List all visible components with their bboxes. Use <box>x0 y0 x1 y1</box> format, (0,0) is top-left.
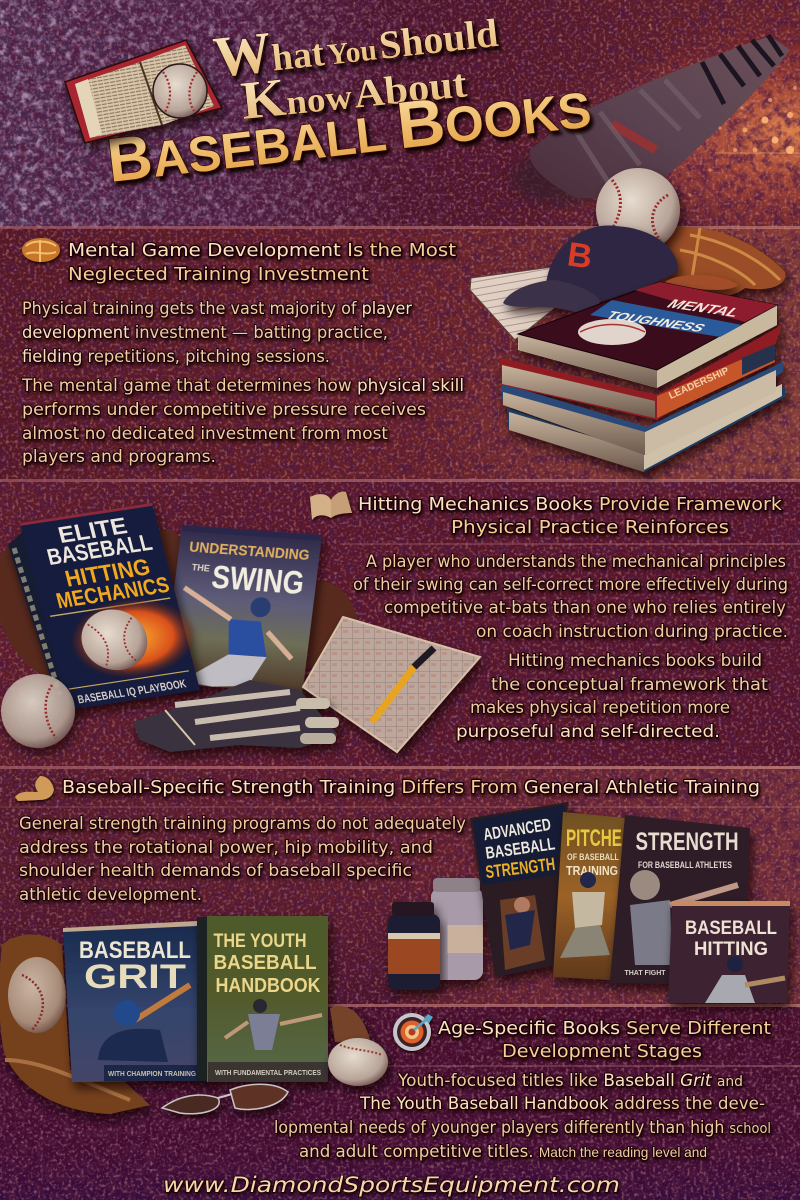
text: mental game body: development investment — batting practice, <box>22 323 388 343</box>
book: Advanced Baseball Strength: BASEBALL <box>484 834 556 863</box>
book: Elite Baseball Hitting Mechanics: BASEBALL <box>45 530 155 571</box>
book: Advanced Baseball Strength <box>470 802 568 977</box>
text: hitting mechanics body <box>353 552 788 742</box>
book: Pitcher Training: TRAINING <box>566 863 618 878</box>
book: Elite Baseball Hitting Mechanics: HITTING <box>63 555 153 592</box>
book: Elite Baseball Hitting Mechanics: ELITE <box>56 514 130 549</box>
book: Elite Baseball Hitting Mechanics: MECHANICS <box>53 572 172 613</box>
baseball in glove <box>8 957 66 1033</box>
text: age specific body: lopmental needs of younger players differently than high school <box>274 1118 771 1138</box>
text: mental game body: Physical training gets the vast majority of player <box>22 299 412 319</box>
panel: hitting mechanics <box>0 491 788 752</box>
text: mental game body: performs under competitive pressure receives <box>22 400 426 420</box>
book: Advanced Baseball Strength: ADVANCED <box>482 815 552 844</box>
title line: Baseball Books: BASEBALLBOOKS <box>103 67 594 196</box>
heading: age specific <box>438 1018 771 1062</box>
baseball <box>328 1038 388 1086</box>
text: mental game body: players and programs. <box>22 447 216 467</box>
baseball <box>1 674 75 748</box>
baseball on book <box>153 64 207 118</box>
heading: age specific: Age-Specific Books Serve Different <box>438 1018 771 1039</box>
book: Baseball Hitting: HITTING <box>694 939 768 960</box>
book 4 <box>507 387 785 472</box>
baseball <box>596 168 680 252</box>
panel: mental game <box>21 168 785 472</box>
book: Strength for Baseball Athletes: FOR BASEBALL ATHLETES <box>638 860 732 870</box>
book: Baseball Hitting: BASEBALL <box>685 918 777 939</box>
book: The Youth Baseball Handbook: BASEBALL <box>214 952 316 974</box>
text: mental game body: The mental game that determines how physical skill <box>21 376 464 396</box>
book 3 <box>501 362 783 455</box>
sunglasses <box>162 1084 288 1114</box>
book: Understanding the Swing: THE <box>191 562 211 573</box>
text: mental game body: almost no dedicated investment from most <box>22 424 388 444</box>
book: The Youth Baseball Handbook <box>197 916 328 1082</box>
text: strength training body: address the rotational power, hip mobility, and <box>19 838 433 858</box>
heading: mental game: Neglected Training Investment <box>68 264 369 285</box>
text: mental game body: fielding repetitions, pitching sessions. <box>22 347 330 367</box>
icon: brain <box>22 238 60 262</box>
heading: hitting mechanics: Hitting Mechanics Books Provide Framework <box>358 494 783 515</box>
book: Pitcher Training <box>553 812 625 980</box>
icon: open book <box>310 491 352 520</box>
book: The Youth Baseball Handbook: HANDBOOK <box>216 975 321 997</box>
text: hitting mechanics body: on coach instruction during practice. <box>476 622 788 642</box>
book: Baseball Hitting <box>668 901 790 1003</box>
heading: mental game: Mental Game Development Is the Most <box>68 240 456 261</box>
text: age specific body: and adult competitive titles. Match the reading level and <box>299 1142 707 1162</box>
text: age specific body: Youth-focused titles like Baseball Grit and <box>397 1071 743 1091</box>
heading: hitting mechanics: Physical Practice Reinforces <box>451 517 729 538</box>
text: age specific body <box>274 1071 771 1162</box>
book: Strength for Baseball Athletes: STRENGTH <box>636 828 738 856</box>
book: Advanced Baseball Strength: STRENGTH <box>484 854 556 882</box>
heading: mental game <box>68 240 456 285</box>
title <box>103 0 594 196</box>
book 2 <box>500 325 782 420</box>
book: Baseball Grit: WITH CHAMPION TRAINING <box>108 1069 196 1078</box>
book: The Youth Baseball Handbook: WITH FUNDAMENTAL PRACTICES <box>215 1068 321 1077</box>
heading: strength training: Baseball-Specific Strength Training Differs From General Athletic Training <box>62 777 760 798</box>
baseball bat <box>512 35 790 204</box>
text: hitting mechanics body: A player who understands the mechanical principles <box>366 552 786 572</box>
baseball cap: B <box>565 235 595 277</box>
book stack <box>500 282 785 472</box>
large glove <box>0 934 150 1114</box>
text: hitting mechanics body: Hitting mechanics books build <box>508 651 762 671</box>
book: Baseball Grit: GRIT <box>84 958 186 996</box>
text: strength training body: General strength training programs do not adequately <box>19 814 466 834</box>
book: The Youth Baseball Handbook: THE YOUTH <box>214 931 306 952</box>
book: Understanding the Swing: SWING <box>210 559 306 601</box>
supplement jar: white <box>431 878 483 980</box>
text: hitting mechanics body: makes physical repetition more <box>470 698 730 718</box>
icon: flexed arm <box>15 776 54 801</box>
supplement jar: dark <box>388 902 440 990</box>
title line: Know About: KnowAbout <box>238 48 470 131</box>
glove <box>650 227 785 297</box>
scorecard <box>303 617 480 752</box>
book: Elite Baseball Hitting Mechanics: BASEBALL IQ PLAYBOOK <box>76 677 188 706</box>
text: strength training body <box>19 814 466 905</box>
glove behind books <box>0 529 358 680</box>
text: hitting mechanics body: purposeful and self-directed. <box>456 722 720 742</box>
book stack: TOUGHNESS <box>602 309 709 335</box>
illustration: stack of books, cap, glove and ball <box>470 168 785 472</box>
text: age specific body: The Youth Baseball Handbook address the deve- <box>359 1094 765 1114</box>
text: strength training body: athletic development. <box>19 885 202 905</box>
panel: age specific <box>0 916 771 1162</box>
book 1 <box>518 305 777 388</box>
book: Strength for Baseball Athletes <box>610 815 750 985</box>
heading: age specific: Development Stages <box>502 1041 702 1062</box>
heading: hitting mechanics <box>358 494 783 538</box>
book stack: MENTAL <box>663 297 745 320</box>
book: Pitcher Training: PITCHE <box>566 825 622 852</box>
book: Baseball Grit: BASEBALL <box>79 937 191 964</box>
book: Understanding the Swing: UNDERSTANDING <box>188 540 310 564</box>
book: Understanding the Swing <box>162 525 322 693</box>
notepad <box>470 267 565 340</box>
footer: website: www.DiamondSportsEquipment.com <box>163 1173 620 1197</box>
text: hitting mechanics body: the conceptual framework that <box>491 675 768 695</box>
illustration: strength books and supplements <box>388 802 790 1003</box>
small glove <box>330 1006 370 1042</box>
illustration: youth books, glove, ball and sunglasses <box>0 916 388 1114</box>
batter figure <box>172 588 299 692</box>
text: strength training body: shoulder health demands of baseball specific <box>19 861 412 881</box>
book: Pitcher Training: OF BASEBALL <box>567 852 619 862</box>
book: Strength for Baseball Athletes: THAT FIGHT <box>624 970 666 977</box>
icon: target with arrow <box>393 1013 433 1051</box>
panel: strength training <box>15 776 790 1003</box>
title line: What You Should: WhatYouShould <box>210 0 501 90</box>
icon: open book with baseball <box>65 40 222 143</box>
sparkles <box>558 24 800 196</box>
pencil <box>372 648 434 722</box>
book: Baseball Grit <box>63 921 202 1082</box>
book: Elite Baseball Hitting Mechanics <box>8 501 210 712</box>
illustration: hitting books, gloves, scorecard <box>0 501 480 752</box>
text: hitting mechanics body: competitive at-bats than one who relies entirely <box>384 598 786 618</box>
book stack: LEADERSHIP <box>667 365 731 402</box>
batting gloves <box>133 680 339 752</box>
baseball cap <box>503 226 738 316</box>
text: hitting mechanics body: of their swing can self-correct more effectively during <box>353 575 788 595</box>
text: mental game body <box>21 299 464 467</box>
